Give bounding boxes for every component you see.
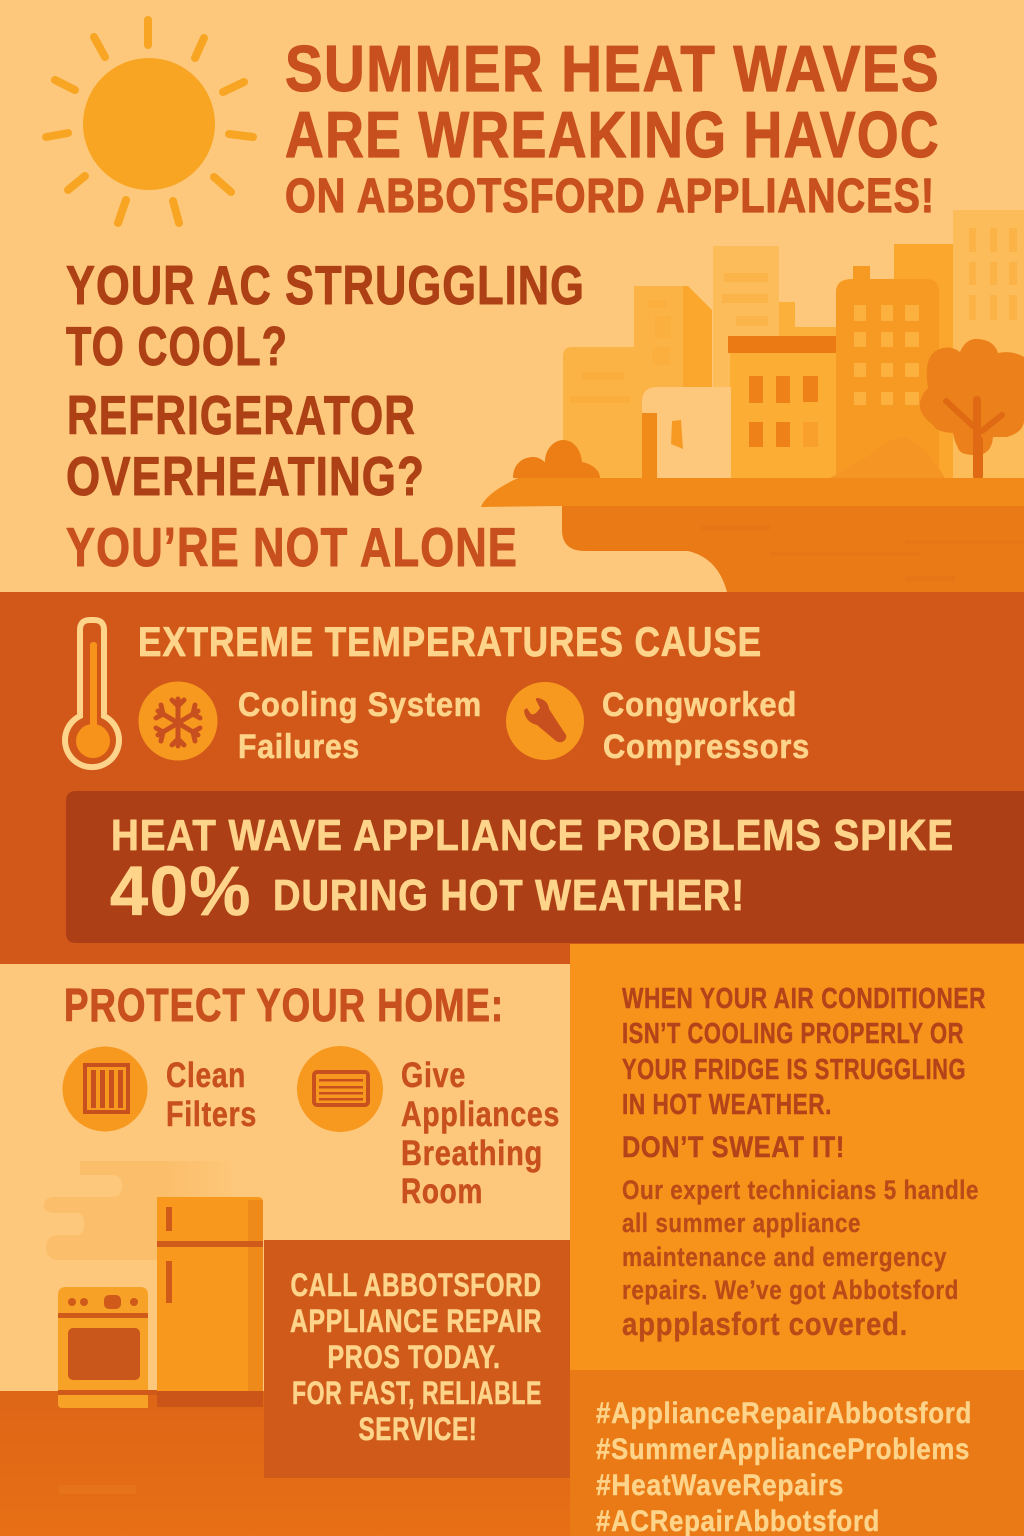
message text block: appplasfort covered. [622,1306,908,1342]
floor [0,1391,570,1536]
question text block: YOU’RE NOT ALONE [66,516,518,578]
title: SUMMER HEAT WAVES [285,32,940,105]
icon: air vent [297,1046,383,1132]
question text block: OVERHEATING? [66,445,425,507]
panel: extreme temperatures [0,592,1024,964]
panel: call to action [264,1240,570,1478]
message text block: DON’T SWEAT IT! [622,1131,845,1164]
text: clean filters: Filters [166,1095,257,1134]
callout: 40 percent spike: DURING HOT WEATHER! [273,871,745,920]
panel: hashtags: #ApplianceRepairAbbotsford [596,1397,972,1430]
question text block: YOUR AC STRUGGLING [66,254,585,316]
text: overworked compressors: Congworked [602,686,797,724]
icon: oven [58,1287,157,1408]
text: give appliances breathing room: Give [401,1056,466,1095]
message text block: all summer appliance [622,1208,861,1238]
callout: 40 percent spike [66,791,1024,943]
text: clean filters: Clean [166,1056,246,1095]
panel: call to action: APPLIANCE REPAIR [290,1303,542,1339]
panel: hashtags: #HeatWaveRepairs [596,1469,844,1502]
callout: 40 percent spike: 40% [110,852,252,930]
icon: sun [46,20,253,223]
message text block: IN HOT WEATHER. [622,1089,832,1121]
message text block [622,983,986,1342]
icon: wrench [506,682,584,760]
question text block: REFRIGERATOR [67,384,416,446]
panel: call to action: SERVICE! [358,1411,478,1447]
illustration: city skyline [481,210,1024,592]
question text block [66,254,585,578]
panel: call to action: CALL ABBOTSFORD [290,1267,542,1303]
icon: air filter [62,1046,148,1132]
text: give appliances breathing room [401,1056,560,1211]
icon: snowflake [138,682,218,760]
heading: protect your home: PROTECT YOUR HOME: [64,979,504,1031]
heading: extreme temperatures cause: EXTREME TEMPERATURES CAUSE [138,618,762,665]
message text block: maintenance and emergency [622,1242,947,1272]
question text block: TO COOL? [66,315,288,377]
text: cooling system failures: Failures [238,728,360,766]
panel: hashtags [570,1370,1024,1536]
icon: tree [920,339,1024,476]
text: overworked compressors [602,686,810,766]
text: cooling system failures [238,686,482,766]
message text block: repairs. We’ve got Abbotsford [622,1275,959,1305]
title [285,32,940,223]
text: give appliances breathing room: Appliances [401,1095,560,1134]
text: overworked compressors: Compressors [603,728,810,766]
text: cooling system failures: Cooling System [238,686,482,724]
icon: thermometer [65,620,119,767]
panel: hashtags: #SummerApplianceProblems [596,1433,970,1466]
heat haze [44,1161,232,1260]
panel: call to action: PROS TODAY. [328,1339,500,1375]
text: clean filters [166,1056,257,1134]
panel: call to action: FOR FAST, RELIABLE [292,1375,542,1411]
text: give appliances breathing room: Breathing [401,1134,543,1173]
panel: message background [570,944,1024,1370]
icon: refrigerator [157,1197,263,1407]
text: give appliances breathing room: Room [401,1172,483,1211]
